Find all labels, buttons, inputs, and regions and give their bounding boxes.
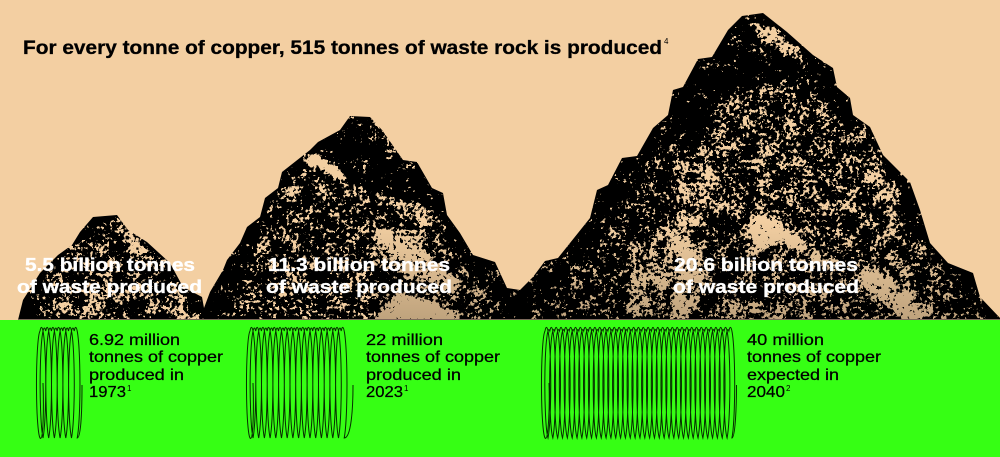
text: 2040 copper forecast: 2: [786, 384, 791, 393]
text: 1973 copper production: tonnes of copper: [89, 349, 224, 366]
green band: [0, 320, 1000, 457]
text: 2023 copper production: produced in: [366, 367, 461, 384]
text: 2023 copper production: tonnes of copper: [366, 349, 501, 366]
label: 11.3 billion tonnes: of waste produced: [266, 276, 452, 297]
label: 11.3 billion tonnes: [266, 254, 452, 297]
label: 11.3 billion tonnes: 11.3 billion tonnes: [268, 254, 450, 275]
title: For every tonne of copper, 515 tonnes of waste rock is produced: [23, 38, 662, 59]
label: 5.5 billion tonnes: [17, 254, 202, 297]
text: 1973 copper production: 6.92 million: [89, 332, 180, 349]
icon: copper coil 1973: [36, 327, 82, 438]
text: 2023 copper production: 22 million: [366, 332, 443, 349]
label: 20.6 billion tonnes: [673, 254, 859, 297]
text: 1973 copper production: produced in: [89, 367, 184, 384]
text: 1973 copper production: [89, 332, 224, 401]
text: 2040 copper forecast: 2040: [747, 384, 785, 401]
mountains of waste rock: [0, 0, 1000, 320]
title: 4: [664, 37, 669, 46]
text: 2040 copper forecast: expected in: [747, 367, 839, 384]
text: 2023 copper production: 1: [404, 384, 409, 393]
label: 5.5 billion tonnes: of waste produced: [17, 276, 202, 297]
text: 2023 copper production: [366, 332, 501, 401]
icon: copper coil 2040: [541, 327, 736, 438]
text: 2023 copper production: 2023: [366, 384, 403, 401]
label: 20.6 billion tonnes: of waste produced: [673, 276, 859, 297]
text: 2040 copper forecast: 40 million: [747, 332, 824, 349]
text: 2040 copper forecast: tonnes of copper: [747, 349, 882, 366]
label: 20.6 billion tonnes: 20.6 billion tonnes: [674, 254, 858, 275]
text: 2040 copper forecast: [747, 332, 882, 401]
label: 5.5 billion tonnes: 5.5 billion tonnes: [25, 254, 195, 275]
text: 1973 copper production: 1: [127, 384, 132, 393]
text: 1973 copper production: 1973: [89, 384, 126, 401]
background: [0, 0, 1000, 320]
icon: copper coil 2023: [246, 327, 353, 438]
